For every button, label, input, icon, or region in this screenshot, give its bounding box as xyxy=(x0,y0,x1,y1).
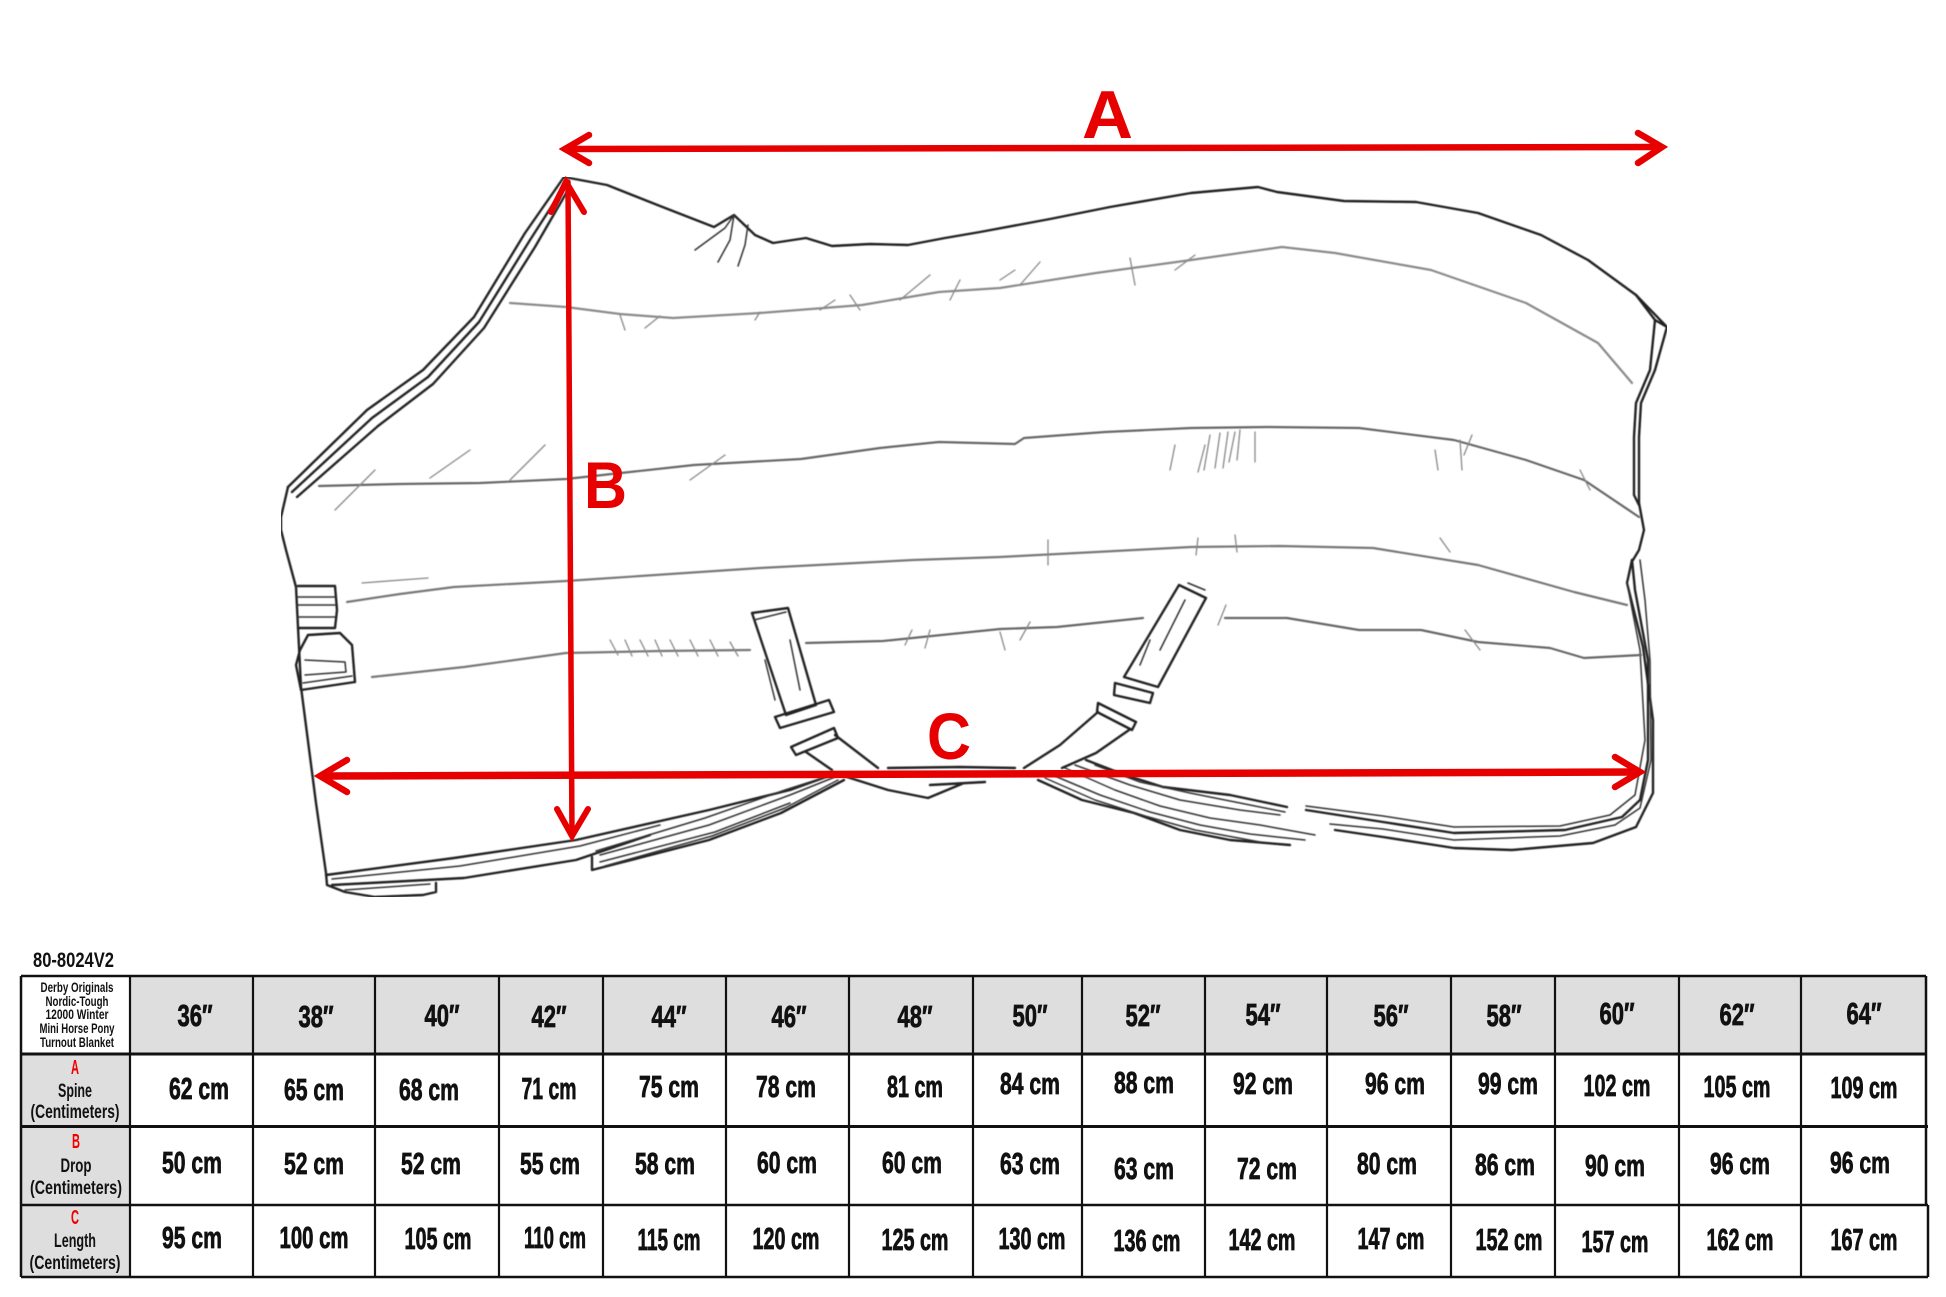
table grid xyxy=(21,976,1928,1277)
row C values: 105 cm xyxy=(404,1221,472,1256)
row label A: Spine: Spine xyxy=(58,1081,92,1102)
right belly strap xyxy=(1024,583,1206,768)
row A values: 78 cm xyxy=(756,1069,816,1104)
collar peak marks xyxy=(695,215,748,266)
row label C: Length xyxy=(30,1207,120,1274)
row label B: Drop: (Centimeters) xyxy=(30,1178,122,1199)
row C values: 125 cm xyxy=(882,1222,948,1257)
seam line 3 xyxy=(347,546,1627,605)
row C values: 115 cm xyxy=(638,1222,700,1257)
row C values: 120 cm xyxy=(752,1221,820,1256)
arrow B: drop xyxy=(551,182,588,836)
table cell shading xyxy=(21,976,1926,1277)
row C values: 152 cm xyxy=(1476,1222,1542,1257)
label C: C xyxy=(927,699,971,773)
blanket tail binding xyxy=(1633,295,1667,560)
size table xyxy=(21,976,1928,1277)
product code: 80-8024V2 xyxy=(33,949,114,972)
blanket topline xyxy=(564,177,1667,327)
row A values: 84 cm xyxy=(1000,1066,1060,1101)
header row: sizes in inches: 46″ xyxy=(772,999,807,1034)
hatching marks xyxy=(335,255,1590,656)
row B values: 58 cm xyxy=(635,1146,695,1181)
illustration: turnout blanket sketch xyxy=(281,177,1667,897)
label B: B xyxy=(584,448,627,522)
row B values: 80 cm xyxy=(1357,1146,1417,1181)
header row: sizes in inches: 60″ xyxy=(1600,996,1635,1031)
row A values: 88 cm xyxy=(1114,1065,1174,1100)
chest buckle tab lower xyxy=(296,633,355,690)
row A values: 62 cm xyxy=(169,1071,229,1106)
row C values: 95 cm xyxy=(162,1220,222,1255)
row B values: 96 cm xyxy=(1830,1145,1890,1180)
row B values: 52 cm xyxy=(401,1146,461,1181)
product name cell xyxy=(40,980,115,1050)
left belly strap xyxy=(752,608,878,770)
row label B: Drop xyxy=(30,1131,122,1199)
row A values xyxy=(169,1065,1898,1107)
row label A: Spine: A xyxy=(71,1057,79,1079)
row B values xyxy=(162,1145,1890,1186)
row C values: 110 cm xyxy=(524,1220,586,1255)
row label B: Drop: B xyxy=(72,1131,80,1153)
seam line 1 xyxy=(510,247,1632,383)
row label A: Spine xyxy=(30,1057,120,1123)
row C values: 147 cm xyxy=(1358,1221,1424,1256)
row C values: 157 cm xyxy=(1582,1224,1648,1259)
row C values xyxy=(162,1220,1898,1259)
row B values: 86 cm xyxy=(1475,1147,1535,1182)
row C values: 130 cm xyxy=(998,1221,1066,1256)
row B values: 52 cm xyxy=(284,1146,344,1181)
header row: sizes in inches: 54″ xyxy=(1246,997,1281,1032)
header row: sizes in inches: 62″ xyxy=(1720,997,1755,1032)
belly strap loop xyxy=(847,767,1015,798)
row B values: 96 cm xyxy=(1710,1146,1770,1181)
header row: sizes in inches: 36″ xyxy=(178,998,213,1033)
row label C: Length: Length xyxy=(54,1231,96,1252)
row A values: 96 cm xyxy=(1365,1066,1425,1101)
row B values: 60 cm xyxy=(757,1145,817,1180)
blanket front hem xyxy=(326,773,844,890)
product name cell: 12000 Winter xyxy=(46,1007,109,1022)
row C values: 167 cm xyxy=(1830,1222,1898,1257)
blanket left edge xyxy=(281,487,436,897)
row B values: 60 cm xyxy=(882,1145,942,1180)
row B values: 55 cm xyxy=(520,1146,580,1181)
header row: sizes in inches: 64″ xyxy=(1846,996,1882,1031)
row label C: Length: C xyxy=(71,1207,79,1229)
row A values: 75 cm xyxy=(639,1069,699,1104)
row B values: 90 cm xyxy=(1585,1148,1645,1183)
seam line 4 xyxy=(372,618,1641,677)
seam line 2 xyxy=(319,427,1639,517)
header row: sizes in inches: 38″ xyxy=(298,999,334,1034)
product name cell: Derby Originals xyxy=(40,980,114,995)
row B values: 50 cm xyxy=(162,1145,222,1180)
product name cell: Mini Horse Pony xyxy=(40,1021,115,1036)
blanket rear edge and hem xyxy=(1306,560,1653,850)
header row: sizes in inches: 58″ xyxy=(1486,998,1522,1033)
product name cell: Turnout Blanket xyxy=(40,1035,114,1050)
row label C: Length: (Centimeters) xyxy=(30,1253,120,1274)
row B values: 63 cm xyxy=(1114,1151,1174,1186)
header row: sizes in inches: 56″ xyxy=(1374,998,1409,1033)
chest buckle tab upper xyxy=(298,586,337,628)
product name cell: Nordic-Tough xyxy=(46,994,108,1009)
row C values: 136 cm xyxy=(1114,1223,1180,1258)
row B values: 72 cm xyxy=(1237,1151,1297,1186)
row A values: 105 cm xyxy=(1704,1069,1770,1104)
row A values: 102 cm xyxy=(1584,1068,1650,1103)
header row: sizes in inches: 40″ xyxy=(424,998,460,1033)
arrow A: spine xyxy=(565,133,1662,163)
row A values: 65 cm xyxy=(284,1072,344,1107)
header row: sizes in inches xyxy=(178,996,1882,1034)
row C values: 162 cm xyxy=(1706,1222,1774,1257)
arrow C: length xyxy=(320,757,1640,792)
rear belly strap bundle xyxy=(1038,760,1315,845)
header row: sizes in inches: 48″ xyxy=(898,999,933,1034)
header row: sizes in inches: 52″ xyxy=(1126,998,1161,1033)
header row: sizes in inches: 50″ xyxy=(1012,998,1048,1033)
row B values: 63 cm xyxy=(1000,1146,1060,1181)
row A values: 68 cm xyxy=(399,1072,459,1107)
row label B: Drop: Drop xyxy=(60,1156,92,1177)
row A values: 92 cm xyxy=(1233,1066,1293,1101)
label A: A xyxy=(1082,77,1133,153)
header row: sizes in inches: 42″ xyxy=(532,999,567,1034)
header row: sizes in inches: 44″ xyxy=(652,999,687,1034)
row A values: 81 cm xyxy=(887,1069,943,1104)
row C values: 142 cm xyxy=(1228,1222,1296,1257)
row C values: 100 cm xyxy=(280,1220,348,1255)
row A values: 71 cm xyxy=(522,1071,576,1106)
row label A: Spine: (Centimeters) xyxy=(30,1102,120,1123)
row A values: 99 cm xyxy=(1478,1066,1538,1101)
blanket neck binding xyxy=(288,177,568,497)
row A values: 109 cm xyxy=(1830,1070,1898,1105)
